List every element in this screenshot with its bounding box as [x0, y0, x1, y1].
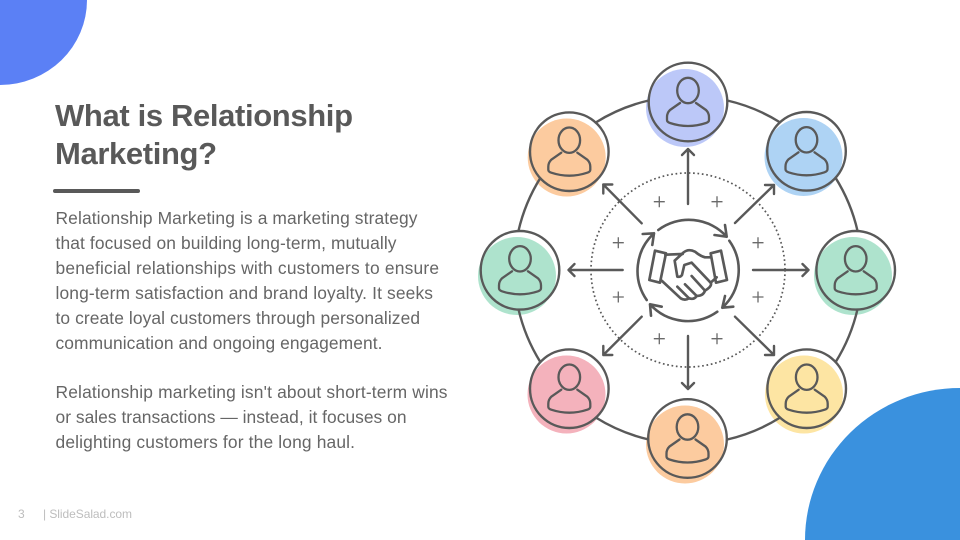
text block: definition paragraph [56, 208, 439, 353]
footer: page number and site: | SlideSalad.com [43, 507, 132, 521]
customer: bottom left [530, 349, 609, 428]
title: What is Relationship [55, 98, 353, 133]
plus signs [613, 196, 764, 344]
customer: bottom [648, 399, 727, 478]
customer: bottom right [767, 349, 846, 428]
text block: second paragraph: or sales transactions — instead, it focuses on [56, 407, 406, 427]
customer: top right [767, 112, 846, 191]
customer: top left [530, 112, 609, 191]
decorative corner shape: top-left blue [0, 0, 87, 85]
text block: definition paragraph: long-term satisfaction and brand loyalty. It seeks [56, 283, 433, 303]
title: Marketing? [55, 136, 217, 171]
circular arrows [638, 220, 739, 321]
customer: top [649, 63, 727, 141]
customer: right [816, 231, 895, 310]
footer: page number and site: 3 [18, 507, 25, 521]
outer connecting ring [514, 96, 862, 444]
text block: definition paragraph: Relationship Marketing is a marketing strategy [56, 208, 418, 228]
text block: definition paragraph: communication and ongoing engagement. [56, 333, 382, 353]
radiating arrows [568, 149, 808, 389]
coloured discs behind the customers [478, 69, 892, 484]
text block: definition paragraph: beneficial relationships with customers to ensure [56, 258, 439, 278]
diagram: relationship marketing network [478, 63, 895, 483]
customer: left [481, 231, 559, 310]
decorative corner shape: bottom-right blue [805, 388, 960, 540]
text block: definition paragraph: that focused on building long-term, mutually [56, 233, 397, 253]
text block: second paragraph: delighting customers for the long haul. [56, 432, 355, 452]
title [55, 98, 353, 171]
title underline [53, 189, 140, 193]
text block: second paragraph [56, 382, 448, 452]
text block: second paragraph: Relationship marketing isn't about short-term wins [56, 382, 448, 402]
icon: handshake [649, 250, 727, 300]
dotted inner ring [591, 173, 785, 367]
text block: definition paragraph: to create loyal customers through personalized [56, 308, 420, 328]
